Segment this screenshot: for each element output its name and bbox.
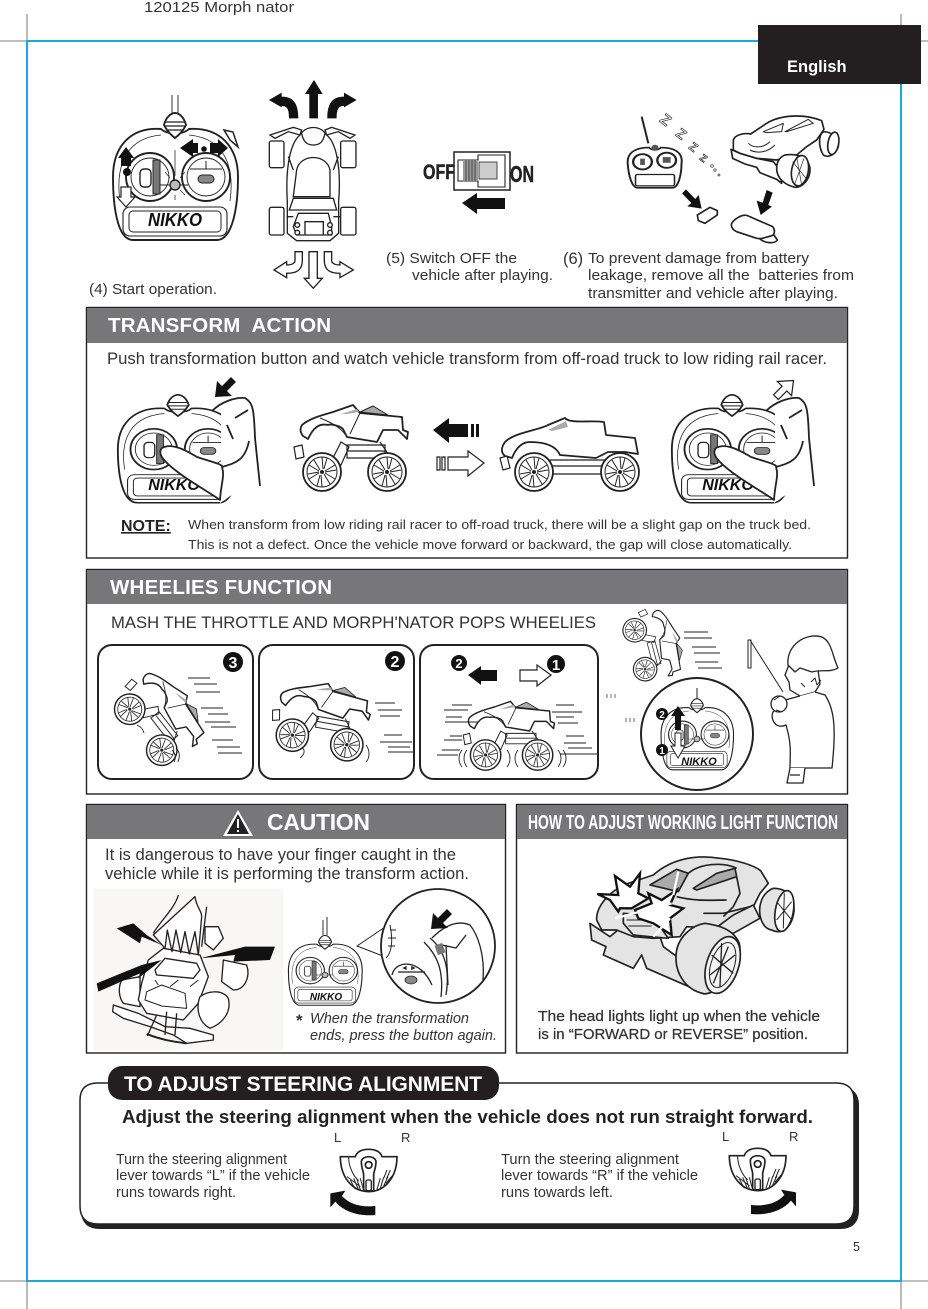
text: left adjustment: Turn the steering alignment [116, 1152, 287, 1168]
icon: hand caught in vehicle [93, 888, 283, 1050]
icon: remote pressing transform button: NIKKO [148, 477, 200, 494]
step 5: switch off [386, 152, 553, 284]
callout: remote throttle detail: 1 [659, 746, 665, 757]
icon: steering lever right [722, 1129, 798, 1214]
icon: sleeping z letters [657, 111, 720, 176]
caption: remove batteries: transmitter and vehicle after playing. [588, 286, 838, 302]
heading tab: steering alignment [108, 1066, 499, 1100]
panel: transform action [86, 308, 848, 558]
step 1 frame [420, 645, 598, 779]
icon: sleeping z letters: Z [673, 125, 690, 143]
caption: switch off: (5) Switch OFF the [386, 251, 517, 267]
text: caution warning: It is dangerous to have your finger caught in the [105, 846, 456, 864]
text: press button note: ends, press the button again. [310, 1028, 497, 1044]
icon: steering lever right: L [722, 1129, 729, 1144]
icon: sleeping z letters: Z [686, 139, 701, 155]
panel: caution [86, 804, 506, 1053]
step 3 frame [98, 645, 253, 779]
panel: wheelies function [86, 570, 848, 794]
icon: transmitter with controls: NIKKO [148, 210, 202, 230]
icon: raised truck [294, 405, 408, 491]
caption: switch off: vehicle after playing. [412, 268, 553, 284]
step 1 frame: 1 [552, 657, 560, 674]
icon: remote with zoomed button: ◄ ► [401, 965, 417, 972]
text: right adjustment: Turn the steering alignment [501, 1152, 679, 1168]
text: head lights caption: The head lights light up when the vehicle [538, 1009, 820, 1025]
icon: remote truck and batteries [628, 116, 841, 243]
icon: steering lever left: L [334, 1130, 341, 1145]
heading tab: steering alignment: TO ADJUST STEERING ALIGNMENT [124, 1073, 482, 1096]
note text: This is not a defect. Once the vehicle move forward or backward, the gap will close automatically. [188, 537, 792, 552]
icon: remote with zoomed button: NIKKO [310, 992, 342, 1003]
step 2 frame: 2 [391, 654, 400, 671]
step 4: start operation [89, 80, 357, 298]
heading: transform action: TRANSFORM ACTION [108, 314, 331, 337]
text: right adjustment: runs towards left. [501, 1185, 613, 1201]
callout: remote throttle detail: NIKKO [681, 756, 717, 768]
text: press button note: When the transformation [310, 1011, 469, 1027]
icon: steering lever right: R [789, 1129, 798, 1144]
language tab [758, 25, 921, 84]
text: right adjustment: lever towards “R” if the vehicle [501, 1168, 698, 1184]
icon: outline right arrow [437, 451, 484, 476]
callout: remote throttle detail [641, 678, 753, 790]
note text: When transform from low riding rail racer to off-road truck, there will be a slight gap on the truck bed. [188, 517, 811, 532]
text: left adjustment: lever towards “L” if the vehicle [116, 1168, 310, 1184]
icon: on off switch: OFF [423, 161, 455, 184]
icon: on off switch: ON [510, 161, 534, 187]
text: left adjustment: runs towards right. [116, 1185, 236, 1201]
icon: low rail racer [500, 418, 639, 491]
heading: caution: CAUTION [267, 809, 370, 835]
text: press button note [296, 1011, 497, 1044]
icon: steering lever left [330, 1130, 410, 1215]
text: caution warning: vehicle while it is performing the transform action. [105, 865, 469, 883]
icon: remote pressing transform button [118, 377, 260, 503]
icon: on off switch [423, 152, 534, 214]
icon: remote releasing transform button: NIKKO [702, 477, 754, 494]
icon: top view of vehicle with direction arrows [269, 80, 357, 288]
panel: steering alignment [80, 1066, 859, 1229]
step 1 frame: 2 [455, 656, 463, 671]
heading: working light [517, 805, 847, 839]
text: wheelies instruction: MASH THE THROTTLE AND MORPH'NATOR POPS WHEELIES [111, 614, 596, 632]
icon: sleeping z letters: Z [657, 111, 674, 130]
icon: black left arrow [433, 418, 479, 443]
icon: truck doing wheelie [607, 603, 722, 722]
text: press button note: * [296, 1011, 303, 1030]
note label: NOTE: [121, 518, 171, 535]
icon: sleeping z letters: Z [697, 153, 709, 165]
icon: transmitter with controls [113, 95, 238, 240]
step 2 frame [259, 645, 414, 779]
heading: wheelies function: WHEELIES FUNCTION [110, 576, 332, 599]
step 6: remove batteries [563, 111, 854, 302]
heading: wheelies function [87, 570, 847, 604]
step number: (6) [563, 250, 583, 268]
caption: remove batteries: To prevent damage from battery [588, 251, 810, 267]
text: steering instruction: Adjust the steering alignment when the vehicle does not run straight forward. [122, 1107, 813, 1127]
language tab: English [787, 58, 847, 76]
caption: start operation: (4) Start operation. [89, 282, 217, 298]
panel: working light [516, 804, 848, 1053]
icon: boy with remote [748, 636, 838, 783]
icon: steering lever left: R [401, 1130, 410, 1145]
page number: 5 [853, 1240, 860, 1254]
heading: transform action [87, 308, 847, 343]
callout: remote throttle detail: 2 [659, 710, 665, 721]
step 3 frame: 3 [229, 655, 238, 672]
icon: remote with zoomed button [288, 889, 495, 1005]
icon: truck with head lights on [590, 857, 797, 998]
heading: caution [87, 805, 505, 839]
icon: remote releasing transform button [672, 380, 814, 503]
text: transformation instruction: Push transformation button and watch vehicle transform from off-road truck to low riding rail racer. [107, 349, 827, 368]
caption: remove batteries: leakage, remove all the batteries from [588, 268, 854, 284]
text: head lights caption: is in “FORWARD or REVERSE” position. [538, 1027, 808, 1043]
